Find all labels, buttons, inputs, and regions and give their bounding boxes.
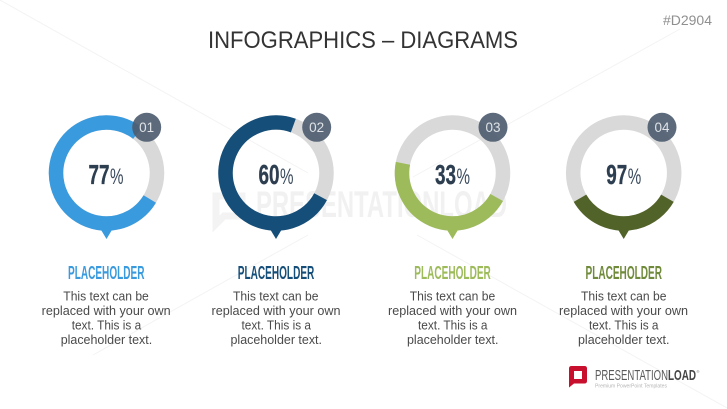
body text: text. This is a [72, 318, 141, 332]
value 33%: 33 [435, 159, 456, 190]
wordmark: LOAD [668, 367, 696, 384]
body text: placeholder text. [407, 333, 498, 347]
value 77%: 77 [88, 159, 110, 190]
body text: replaced with your own [212, 304, 341, 318]
number badge 02: 02 [309, 120, 324, 135]
body text: placeholder text. [61, 333, 152, 347]
body text: This text can be [410, 290, 495, 304]
value 60%: % [280, 164, 294, 189]
icon: logo mark [569, 366, 587, 388]
value 97%: 97 [606, 159, 627, 190]
panel: item 2 [208, 105, 344, 347]
donut chart 97% [555, 104, 693, 242]
number badge 02 [302, 113, 331, 142]
wordmark: PRESENTATION [595, 367, 668, 384]
body text: text. This is a [418, 318, 488, 332]
donut chart 77% [37, 104, 176, 242]
body text [42, 290, 171, 347]
watermark [216, 184, 507, 225]
body text: replaced with your own [559, 304, 688, 318]
number badge 01: 01 [139, 120, 154, 135]
watermark: PRESENTATIONLOAD [256, 184, 507, 225]
body text: placeholder text. [230, 333, 322, 347]
value 97%: % [628, 164, 641, 189]
heading: PLACEHOLDER [414, 263, 491, 283]
value 60%: 60 [258, 159, 280, 190]
donut chart 60% [208, 105, 344, 241]
body text: This text can be [63, 290, 149, 304]
panel: item 3 [384, 104, 521, 347]
body text: This text can be [233, 290, 319, 304]
number badge 03 [478, 113, 508, 142]
panel: item 4 [555, 104, 693, 347]
heading: PLACEHOLDER [238, 263, 314, 283]
body text [388, 290, 517, 347]
heading: PLACEHOLDER [586, 263, 662, 283]
body text: replaced with your own [388, 304, 517, 318]
body text: replaced with your own [42, 304, 171, 318]
number badge 01 [132, 113, 161, 142]
heading: PLACEHOLDER [68, 263, 144, 283]
value 33%: % [456, 164, 470, 189]
panel: item 1 [37, 104, 176, 347]
donut chart 33% [384, 104, 521, 242]
product code: #D2904 [663, 13, 713, 28]
body text [212, 290, 341, 347]
body text: This text can be [581, 290, 667, 304]
value 77%: % [110, 164, 124, 189]
title: INFOGRAPHICS – DIAGRAMS [208, 27, 518, 54]
body text: placeholder text. [578, 333, 670, 347]
number badge 04: 04 [654, 120, 670, 135]
logo: PresentationLoad [569, 366, 700, 390]
body text [559, 290, 688, 347]
body text: text. This is a [589, 318, 659, 332]
wordmark: ® [696, 369, 700, 374]
number badge 03: 03 [485, 120, 501, 135]
wordmark: Premium PowerPoint Templates [595, 384, 667, 390]
number badge 04 [648, 113, 676, 142]
body text: text. This is a [242, 318, 311, 332]
